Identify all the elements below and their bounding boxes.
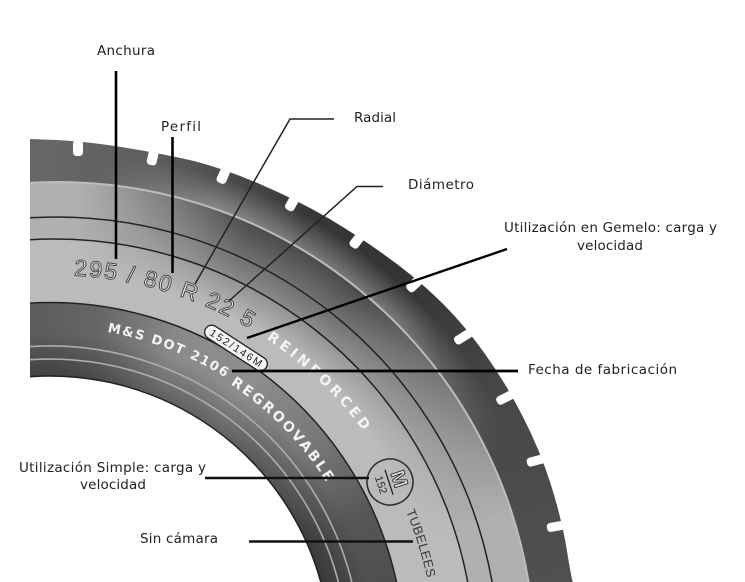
label: Diámetro: Diámetro (408, 177, 474, 193)
dark lower band (30, 303, 396, 582)
tread notches (73, 140, 567, 532)
TUBELEES marking: TUBELEES (407, 508, 436, 577)
M&S DOT marking: M&S DOT 2106 (108, 322, 229, 376)
leader: Radial (195, 119, 334, 284)
label: Sin cámara: Sin cámara (140, 531, 218, 547)
REINFORCED marking: REINFORCED (268, 331, 369, 428)
tread band (30, 139, 573, 582)
tire size marking: 295 / 80 R 22 5 (74, 260, 256, 327)
circled M 152 symbol (361, 453, 419, 511)
label: Utilización en Gemelo: Utilización en Gemelo: carga y (504, 220, 717, 236)
leader: Fecha (232, 370, 518, 372)
leader: Perfil (171, 137, 174, 273)
label: Radial: Radial (354, 110, 396, 126)
lighter inner sidewall (30, 240, 467, 582)
light sidewall disk (30, 183, 528, 582)
leader: Diámetro (229, 186, 383, 301)
inner white rim opening (30, 376, 320, 582)
tire sidewall shaded bands (30, 139, 573, 582)
label: Anchura: Anchura (97, 43, 155, 59)
label: Perfil: Perfil (161, 119, 201, 135)
dark band inner shadow (30, 345, 350, 582)
label: Utilización Simple (19, 460, 206, 493)
leader: Simple (205, 477, 369, 479)
leader: Gemelo (247, 249, 507, 338)
tread inner highlight (118, 170, 482, 433)
label: Utilización Simple: velocidad (80, 477, 146, 493)
label: Utilización Simple: Utilización Simple: carga y (19, 460, 206, 476)
circled M 152 symbol: 152 (372, 475, 389, 496)
leader: Anchura (115, 71, 117, 259)
REGROOVABLE marking: REGROOVABLE (232, 376, 334, 482)
label: Utilización en Gemelo: velocidad (577, 238, 643, 254)
sidewall ring lines (30, 182, 529, 582)
label: Utilización en Gemelo (504, 220, 717, 254)
circled M 152 symbol: M (386, 468, 412, 491)
label: Fecha de fabricación: Fecha de fabricación (528, 362, 677, 378)
sidewall shadow (96, 185, 504, 495)
leader: Sin cámara (249, 540, 413, 543)
load index pill: 152/146M (207, 327, 264, 370)
